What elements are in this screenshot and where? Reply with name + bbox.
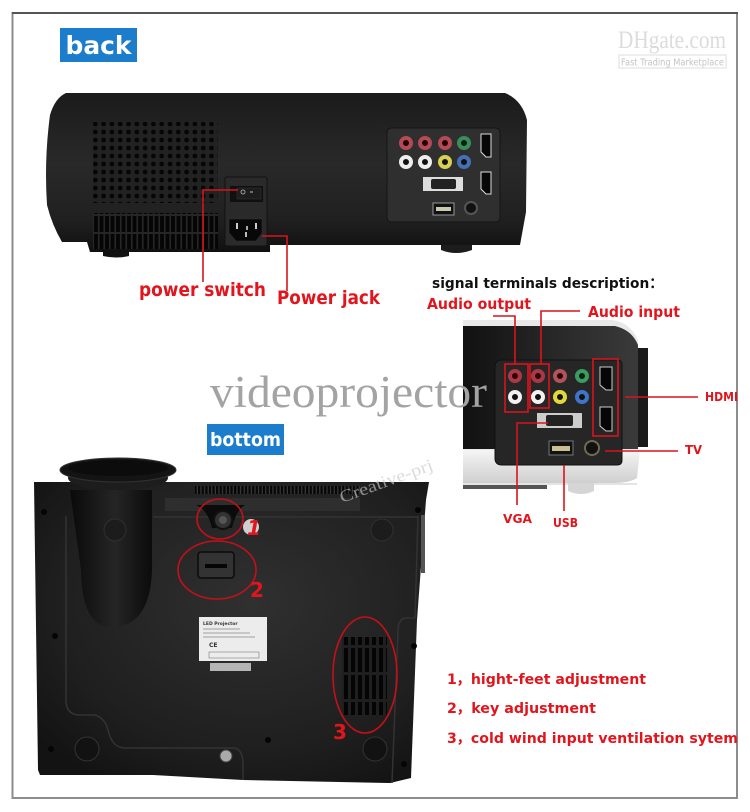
watermark: DHgate: Fast Trading Marketplace	[621, 58, 724, 68]
number 2: 2	[250, 578, 264, 602]
callouts: numbered circles	[178, 499, 397, 733]
connector panel	[387, 128, 500, 222]
heading: signal terminals: signal terminals description：	[432, 276, 663, 292]
speaker grille	[93, 122, 218, 203]
label: power jack: Power jack	[277, 287, 380, 309]
label: HDMI: HDMI	[705, 390, 738, 404]
photo: terminal close-up	[463, 320, 648, 494]
body	[46, 93, 527, 252]
watermark: DHgate	[618, 27, 726, 68]
label: audio output: Audio output	[427, 295, 531, 313]
front ribbed strip	[165, 498, 360, 511]
barrel	[70, 490, 152, 627]
number 1: 1	[247, 516, 261, 540]
badge: bottom	[207, 424, 284, 455]
watermark: videoprojector: videoprojector	[210, 367, 487, 417]
number 3: 3	[333, 720, 347, 744]
badge: bottom: bottom	[210, 429, 281, 451]
adjuster foot	[196, 505, 245, 529]
watermark: DHgate: DHgate.com	[618, 27, 726, 54]
list item 3: 3，cold wind input ventilation sytem	[447, 731, 738, 747]
label: VGA: VGA	[503, 511, 532, 526]
key	[198, 552, 234, 578]
intake vent	[342, 637, 387, 715]
lower slats	[93, 213, 218, 249]
label: audio input: Audio input	[588, 303, 680, 321]
list item 1: 1，hight-feet adjustment	[447, 672, 646, 688]
photo: projector bottom view	[34, 458, 429, 783]
panel seam	[66, 516, 418, 783]
front vent	[195, 486, 360, 494]
photo: projector back view	[46, 93, 527, 258]
list item 2: 2，key adjustment	[447, 701, 596, 717]
label: power switch: power switch	[139, 279, 266, 301]
power module	[225, 177, 267, 246]
foot left	[103, 250, 129, 258]
rubber feet and screws	[41, 507, 421, 767]
product label: CE	[209, 642, 218, 649]
side vent	[421, 515, 425, 573]
foot right	[441, 240, 472, 253]
highlight behind number 1	[243, 519, 259, 535]
callouts: terminal lines and boxes	[493, 311, 698, 511]
body	[34, 482, 429, 783]
watermark: Creative-prj: Creative-prj	[337, 455, 435, 507]
product label: LED Projector	[203, 621, 238, 627]
label: TV: TV	[685, 442, 702, 457]
lens ring	[60, 458, 176, 490]
badge: back: back	[66, 31, 133, 60]
label: USB: USB	[553, 515, 578, 530]
callout lines: power	[203, 190, 287, 291]
terminal panel	[495, 360, 622, 465]
product label	[199, 617, 267, 671]
